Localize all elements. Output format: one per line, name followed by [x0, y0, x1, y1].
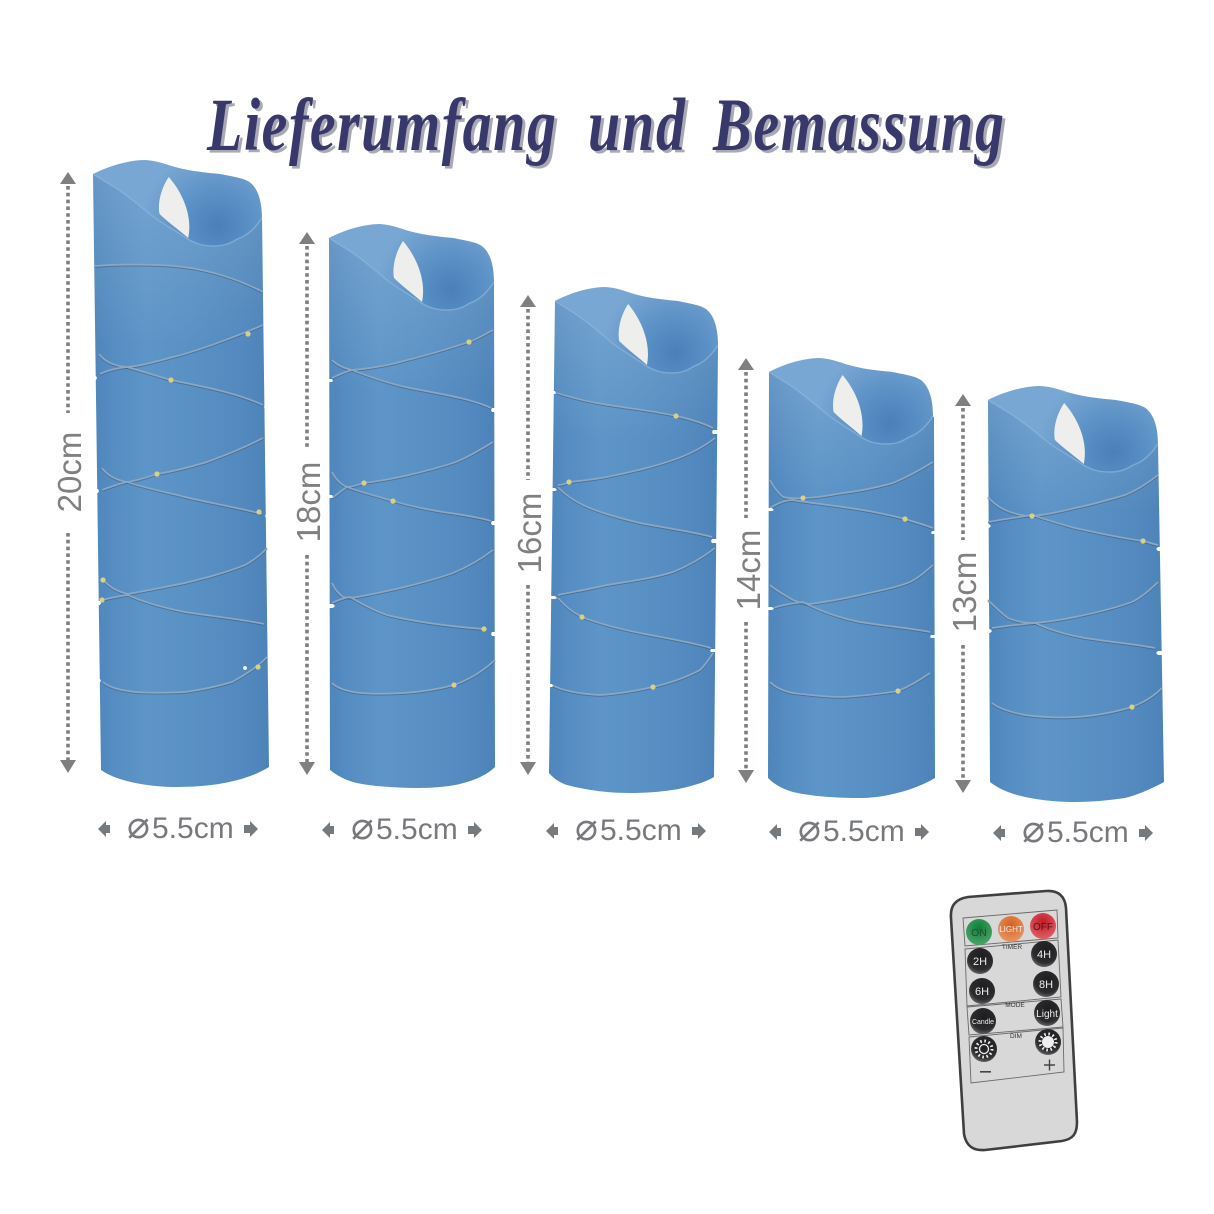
wire: candle 1 [95, 265, 267, 693]
button: Candle [970, 1008, 996, 1034]
edge notches: candle 3 [548, 391, 718, 687]
diameter 2: 5.5cm [376, 813, 458, 846]
candle 5: 13cm [985, 386, 1164, 802]
button: 8H [1033, 971, 1059, 997]
candle 3: 16cm [548, 287, 718, 793]
button: 2H [967, 948, 993, 974]
button: ON [966, 919, 992, 945]
edge notches: candle 5 [985, 524, 1163, 655]
button: OFF [1030, 913, 1056, 939]
button: 6H [969, 978, 995, 1004]
candle 2: 18cm [328, 224, 496, 788]
button: 4H: 4H [1037, 949, 1051, 961]
candle 4: 14cm [767, 358, 937, 798]
button: LIGHT: LIGHT [999, 925, 1023, 934]
diameter 4 [769, 808, 929, 850]
diameter 4: 5.5cm [823, 815, 905, 848]
wire: candle 4 [770, 462, 933, 697]
label: DIM: DIM [1010, 1033, 1022, 1040]
button: dim plus [1035, 1029, 1061, 1055]
dimension: 16cm: 16cm [511, 493, 548, 573]
dimension: 18cm: 18cm [290, 462, 327, 542]
title: Lieferumfang [206, 83, 556, 167]
dimension: 16cm [511, 295, 548, 775]
dimension: 13cm [946, 394, 983, 793]
diameter 1: ⌀ [127, 805, 150, 847]
button: ON: ON [971, 927, 987, 939]
diameter 3 [546, 807, 706, 849]
diameter 1 [98, 805, 258, 847]
title [206, 83, 1004, 167]
wire: candle 2 [332, 330, 495, 694]
wire: candle 5 [988, 475, 1162, 717]
label: TIMER: TIMER [1002, 944, 1022, 951]
remote control [951, 891, 1077, 1150]
wire: candle 3 [552, 393, 715, 695]
button: 8H: 8H [1039, 979, 1053, 991]
button: 2H: 2H [973, 956, 987, 968]
button: Light [1034, 1000, 1060, 1026]
diameter 3: 5.5cm [600, 814, 682, 847]
button: Light: Light [1036, 1009, 1058, 1020]
title: und [588, 83, 686, 167]
diameter 4: ⌀ [798, 808, 821, 850]
candle 1: 20cm [92, 160, 272, 787]
symbol: plus [1044, 1060, 1055, 1070]
button: LIGHT [998, 916, 1024, 942]
edge notches: candle 2 [328, 379, 496, 636]
dimension: 20cm: 20cm [51, 432, 88, 512]
button: 6H: 6H [975, 986, 989, 998]
dimension: 18cm [290, 232, 327, 775]
label: MODE: MODE [1005, 1002, 1025, 1009]
dimension: 14cm [730, 358, 767, 783]
dimension: 20cm [51, 172, 88, 773]
edge notches: candle 1 [92, 292, 272, 682]
button: Candle: Candle [972, 1017, 994, 1026]
diameter 2: ⌀ [351, 806, 374, 848]
button: OFF: OFF [1033, 922, 1053, 933]
diameter 5 [993, 809, 1153, 851]
dimension: 14cm: 14cm [730, 530, 767, 610]
symbol: minus [980, 1071, 991, 1073]
title: Bemassung [712, 83, 1004, 167]
diameter 5: ⌀ [1022, 809, 1045, 851]
diameter 3: ⌀ [575, 807, 598, 849]
button: dim minus [971, 1036, 997, 1062]
button: 4H [1031, 941, 1057, 967]
diameter 2 [322, 806, 482, 848]
diameter 5: 5.5cm [1047, 816, 1129, 849]
edge notches: candle 4 [767, 508, 937, 638]
diameter 1: 5.5cm [152, 812, 234, 845]
dimension: 13cm: 13cm [946, 552, 983, 632]
